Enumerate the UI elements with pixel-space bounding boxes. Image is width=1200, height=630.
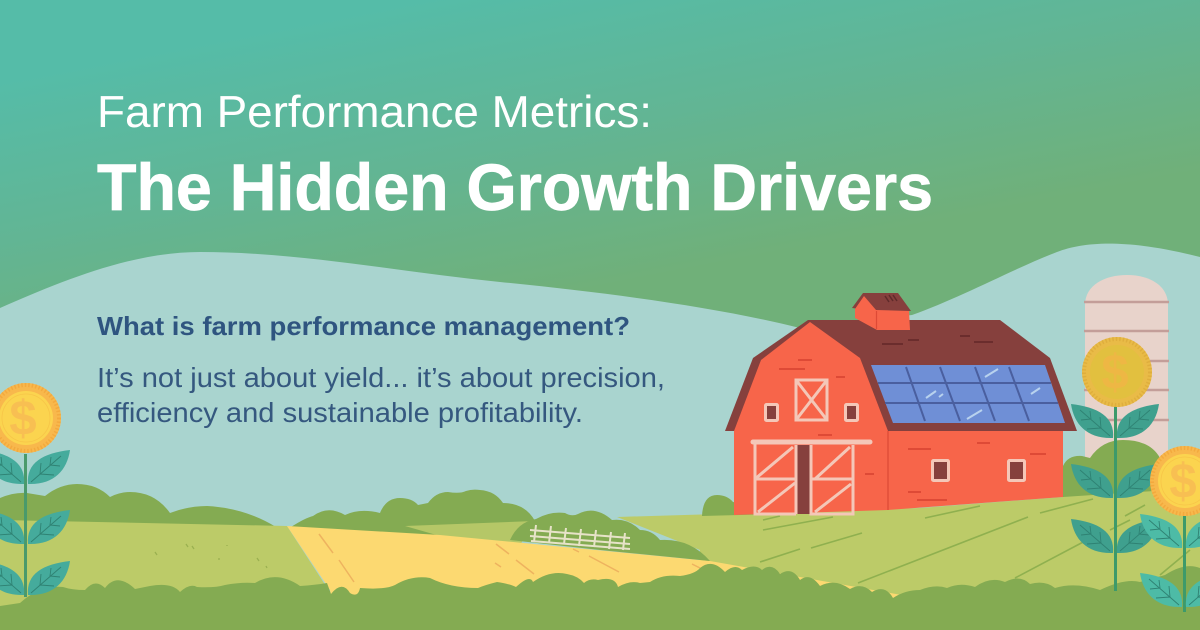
intro heading: What is farm performance management? <box>97 311 630 341</box>
yellow crop field <box>287 526 907 630</box>
light blue hills <box>0 244 1200 630</box>
main right field <box>617 488 1200 630</box>
bushes behind silo <box>1063 440 1200 500</box>
icon: coin: $ <box>1169 455 1197 509</box>
icon: coin <box>0 383 61 453</box>
loft window <box>796 380 827 420</box>
barn <box>725 293 1077 515</box>
right wall <box>888 431 1063 510</box>
roof <box>725 320 1077 431</box>
bush beside barn <box>702 495 780 516</box>
cupola <box>852 293 911 330</box>
distant bushes middle <box>291 490 535 540</box>
field furrows <box>760 499 1190 583</box>
intro body line 1: It’s not just about yield... it’s about precision, <box>97 362 665 393</box>
gable front <box>734 322 888 515</box>
barn door <box>753 442 870 514</box>
silo <box>1084 275 1169 520</box>
yellow field furrows <box>319 534 700 582</box>
distant bushes left <box>0 484 276 527</box>
flower: left coin plant <box>0 383 70 597</box>
title line 1: Farm Performance Metrics: <box>97 88 652 137</box>
fence <box>530 525 630 550</box>
small windows <box>766 404 778 420</box>
left field <box>0 520 335 610</box>
small middle field <box>405 521 535 545</box>
bush behind fence <box>510 511 710 561</box>
field specks <box>155 544 267 568</box>
solar panel <box>871 365 1065 423</box>
title <box>97 88 933 224</box>
roof shingle marks <box>882 336 993 344</box>
title line 2: The Hidden Growth Drivers <box>97 150 933 224</box>
flower: far right coin plant <box>1140 446 1200 612</box>
flower: main right coin plant <box>1071 337 1159 591</box>
icon: coin: $ <box>9 392 37 446</box>
brick marks <box>779 360 1046 500</box>
foreground hedge <box>0 564 1200 630</box>
icon: coin: $ <box>1101 346 1129 400</box>
intro body line 2: efficiency and sustainable profitability. <box>97 397 583 428</box>
icon: coin <box>1082 337 1152 407</box>
intro text block <box>97 311 665 428</box>
icon: coin <box>1150 446 1200 516</box>
